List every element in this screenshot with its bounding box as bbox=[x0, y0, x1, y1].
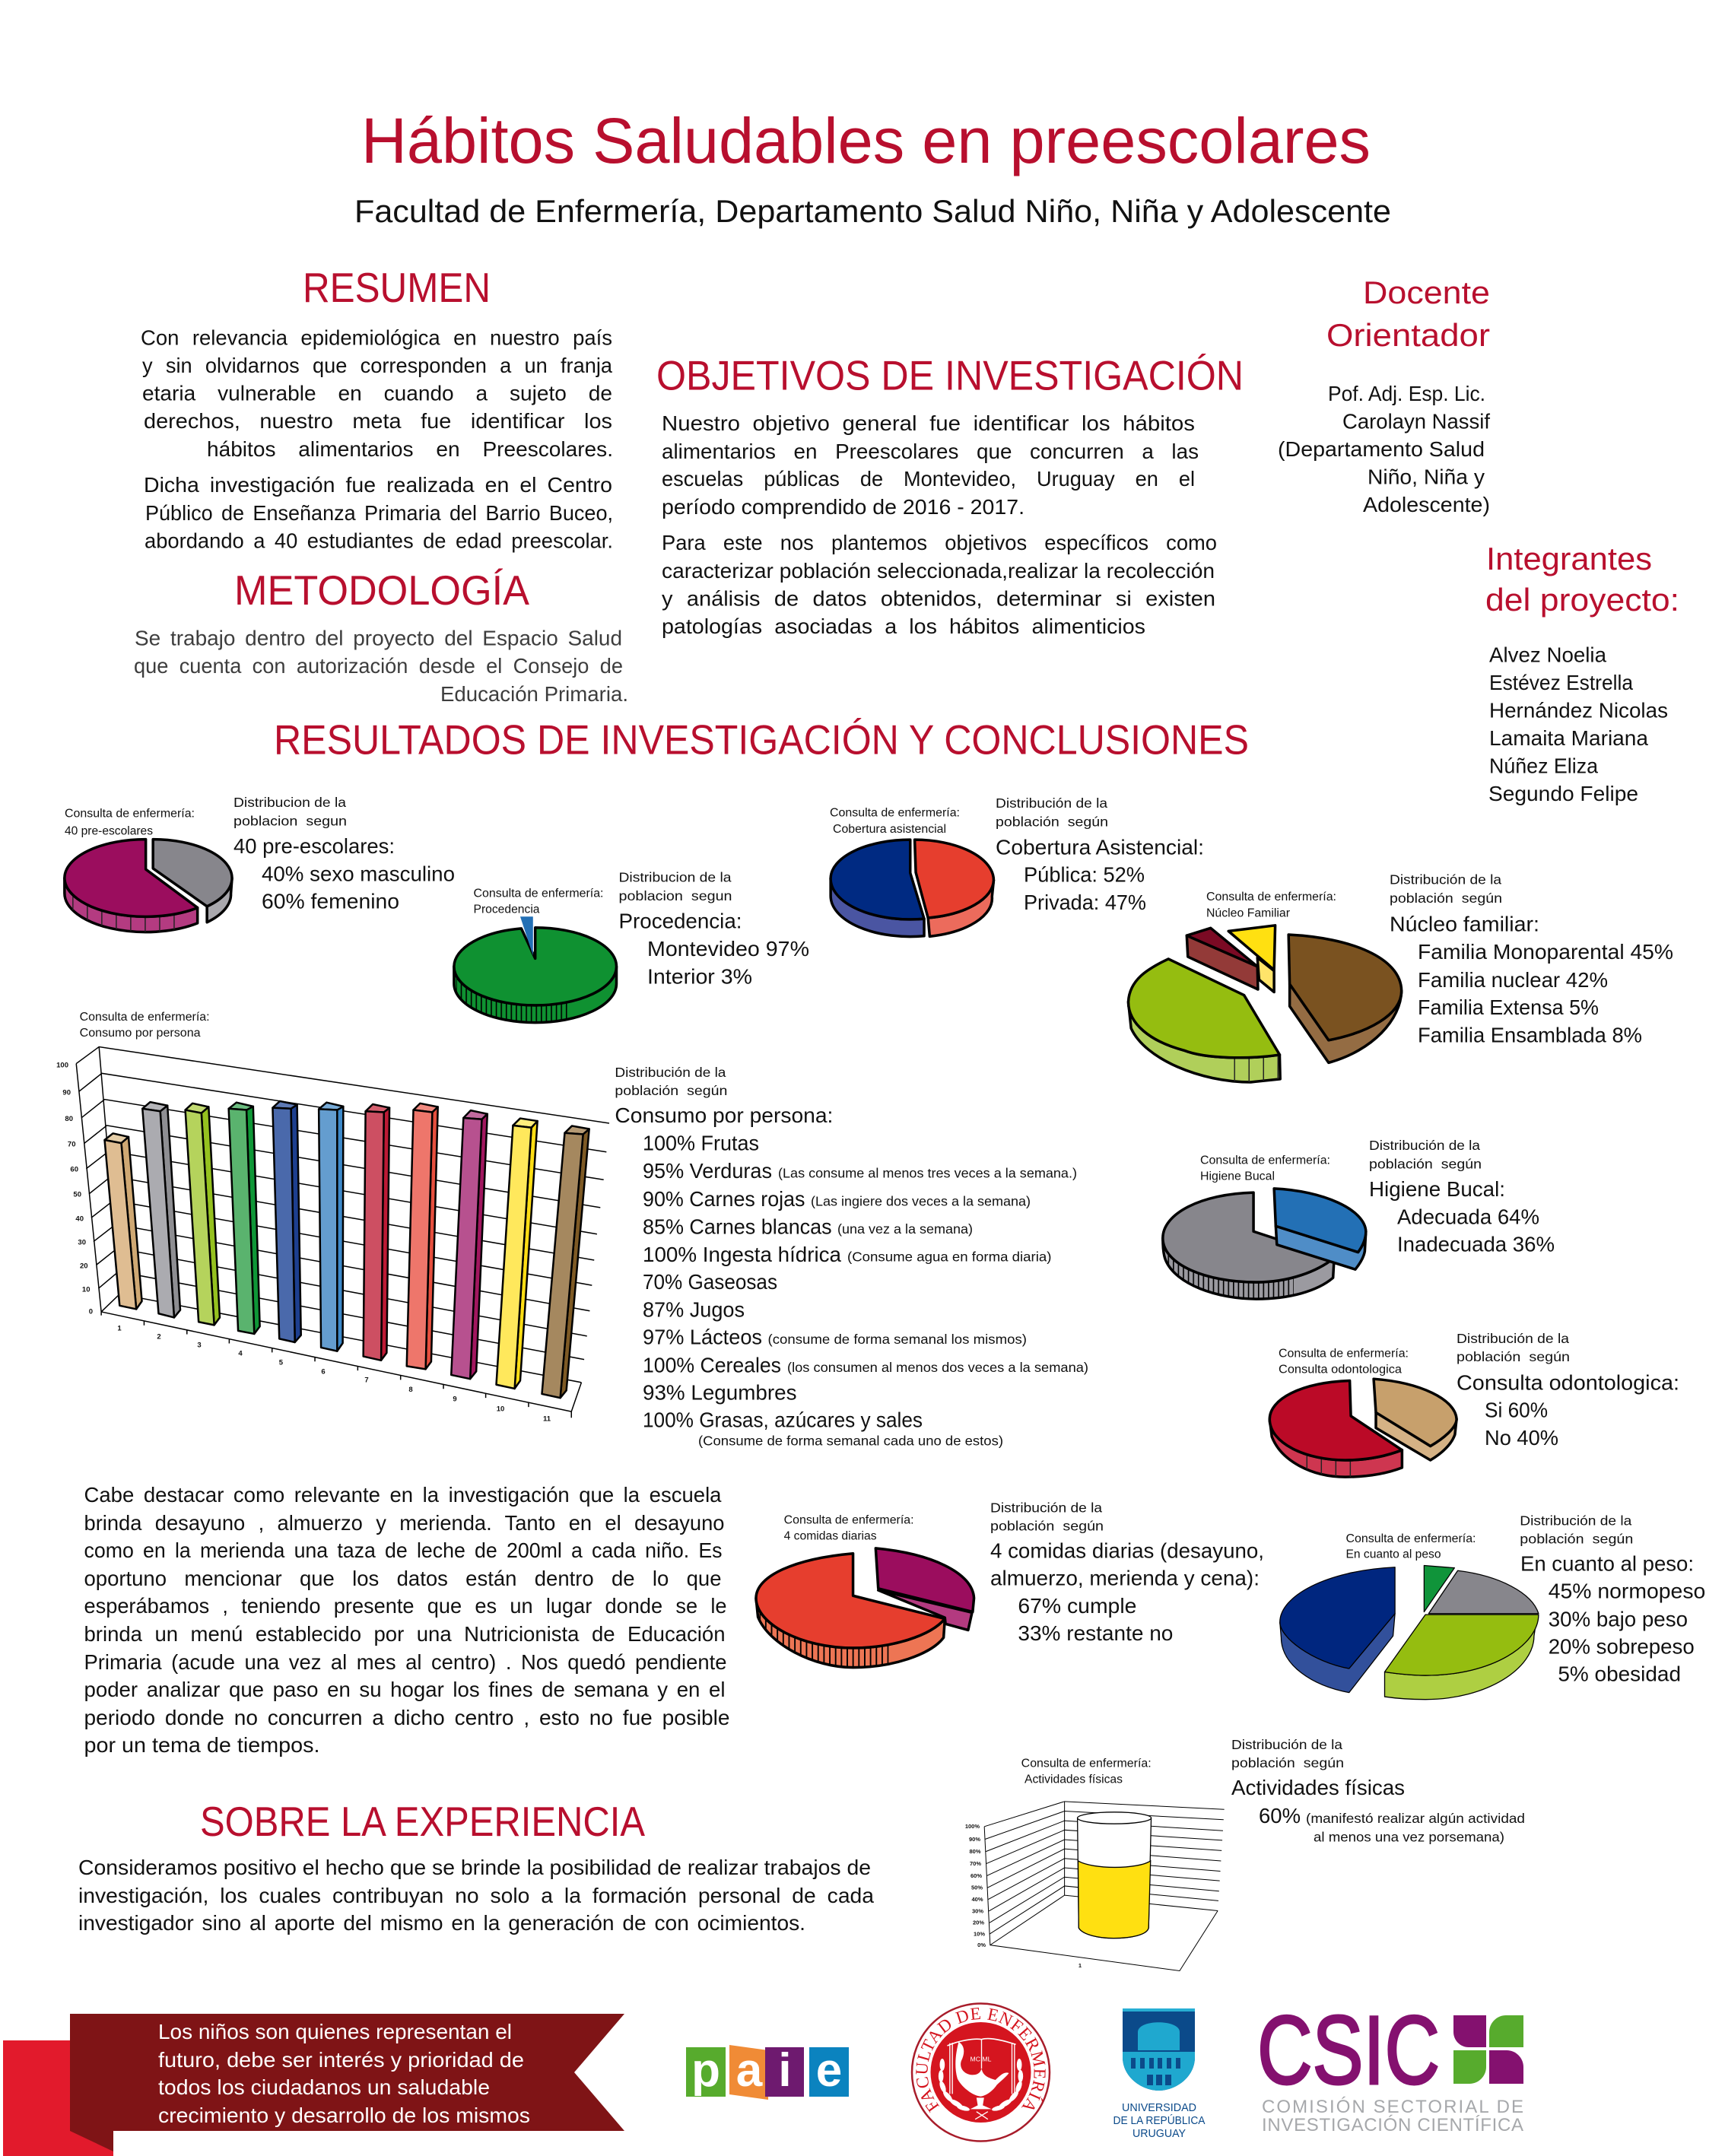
legend text: Higiene Bucal: bbox=[1369, 1177, 1505, 1201]
legend text: 95% Verduras bbox=[643, 1159, 772, 1183]
caption: Consulta de enfermería: bbox=[1021, 1757, 1152, 1770]
pie chart: sexo bbox=[65, 840, 232, 935]
legend text: 60% femenino bbox=[262, 890, 399, 913]
axis labels: 9 bbox=[453, 1395, 457, 1404]
axis labels: 10 bbox=[497, 1405, 504, 1413]
legend text: 4 comidas diarias (desayuno, bbox=[990, 1539, 1264, 1563]
logo: paie: a bbox=[736, 2044, 763, 2097]
text block: conclusiones: poder analizar que paso en su hogar los fines de semana y en el bbox=[84, 1678, 726, 1701]
banner ribbon bbox=[3, 2014, 624, 2156]
logo: facultad de enfermería: FACULTAD DE ENFERMERÍA bbox=[916, 2008, 1046, 2113]
heading: docente orientador: Orientador bbox=[1326, 317, 1490, 353]
legend text: Distribución de la bbox=[1520, 1513, 1632, 1529]
legend text: Núcleo familiar: bbox=[1390, 913, 1539, 935]
logo: paie bbox=[686, 2044, 849, 2100]
caption: Cobertura asistencial bbox=[833, 823, 946, 836]
text block: docente: Carolayn Nassif bbox=[1342, 409, 1490, 433]
axis labels: 5 bbox=[279, 1358, 284, 1367]
text block: integrantes: Lamaita Mariana bbox=[1489, 726, 1648, 750]
legend text: Procedencia: bbox=[619, 910, 742, 932]
caption: Consulta de enfermería: bbox=[784, 1513, 914, 1527]
heading: resultados: RESULTADOS DE INVESTIGACIÓN Y CONCLUSIONES bbox=[274, 716, 1249, 764]
logo: csic bbox=[1257, 1996, 1523, 2135]
text block: experiencia: Consideramos positivo el hecho que se brinde la posibilidad de realizar trabajos de bbox=[78, 1856, 871, 1879]
text block: integrantes: Estévez Estrella bbox=[1489, 671, 1633, 694]
axis labels: 20% bbox=[973, 1919, 984, 1926]
text block: objetivos: período comprendido de 2016 - 2017. bbox=[662, 495, 1025, 519]
caption: Núcleo Familiar bbox=[1206, 907, 1290, 920]
legend text bbox=[233, 795, 455, 913]
text block: docente: Pof. Adj. Esp. Lic. bbox=[1328, 382, 1485, 405]
caption bbox=[80, 1011, 210, 1040]
caption: 40 pre-escolares bbox=[65, 824, 153, 838]
text block: integrantes bbox=[1488, 643, 1668, 805]
heading: integrantes: Integrantes bbox=[1486, 541, 1652, 576]
pie chart: higiene bbox=[1163, 1189, 1366, 1302]
legend text: población según bbox=[990, 1518, 1104, 1533]
panel: cobertura asistencial bbox=[830, 795, 1204, 937]
legend text: 45% normopeso bbox=[1549, 1579, 1705, 1602]
axis labels: 90 bbox=[62, 1089, 71, 1097]
logo: universidad de la república: URUGUAY bbox=[1133, 2127, 1186, 2140]
legend text: 100% Frutas bbox=[643, 1132, 759, 1154]
axis labels: 1 bbox=[1079, 1962, 1082, 1969]
axis labels: 60 bbox=[70, 1165, 78, 1174]
panel: consumo por persona bbox=[56, 1011, 1088, 1448]
legend text: (Consume agua en forma diaria) bbox=[847, 1249, 1051, 1264]
banner text: todos los ciudadanos un saludable bbox=[158, 2075, 490, 2099]
axis labels: 3 bbox=[197, 1342, 202, 1349]
heading: objetivos: OBJETIVOS DE INVESTIGACIÓN bbox=[656, 351, 1244, 398]
legend text: (consume de forma semanal los mismos) bbox=[768, 1332, 1027, 1347]
legend text: 87% Jugos bbox=[643, 1297, 745, 1322]
legend text: población según bbox=[1231, 1755, 1344, 1770]
legend text: 40% sexo masculino bbox=[262, 862, 455, 885]
legend text: 100% Grasas, azúcares y sales bbox=[643, 1408, 923, 1431]
axis labels: 60% bbox=[971, 1872, 982, 1879]
text block: objetivos: patologías asociadas a los hábitos alimenticios bbox=[662, 614, 1145, 638]
axis labels: 11 bbox=[543, 1415, 551, 1424]
text block: resumen: etaria vulnerable en cuando a sujeto de bbox=[142, 382, 612, 405]
text block: resumen: hábitos alimentarios en Preescolares. bbox=[207, 437, 613, 461]
text block: resumen bbox=[141, 325, 613, 552]
legend text: (Las ingiere dos veces a la semana) bbox=[811, 1194, 1031, 1209]
legend text bbox=[990, 1500, 1264, 1645]
caption: Consulta de enfermería: bbox=[830, 806, 960, 820]
text block: conclusiones: brinda desayuno , almuerzo y merienda. Tanto en el desayuno bbox=[84, 1511, 724, 1535]
legend text: 70% Gaseosas bbox=[643, 1270, 777, 1294]
heading: sobre la experiencia: SOBRE LA EXPERIENCIA bbox=[200, 1798, 645, 1845]
axis labels: 90% bbox=[969, 1836, 980, 1843]
legend text: 93% Legumbres bbox=[643, 1381, 797, 1404]
logo: paie: e bbox=[816, 2044, 842, 2097]
caption: Consumo por persona bbox=[80, 1027, 201, 1040]
pie chart: peso bbox=[1280, 1566, 1539, 1700]
axis labels: 2 bbox=[157, 1332, 161, 1342]
logo: universidad de la república bbox=[1113, 2008, 1205, 2140]
logo: csic: COMISIÓN SECTORIAL DE bbox=[1262, 2097, 1523, 2117]
text block: experiencia: investigación, los cuales contribuyan no solo a la formación personal de cada bbox=[78, 1884, 874, 1907]
banner text bbox=[158, 2020, 530, 2127]
axis labels: 10 bbox=[82, 1285, 90, 1294]
axis labels: 6 bbox=[321, 1367, 326, 1376]
text block: integrantes: Segundo Felipe bbox=[1488, 782, 1638, 805]
axis labels: 80% bbox=[969, 1848, 981, 1855]
logo: paie: i bbox=[778, 2044, 792, 2097]
caption bbox=[1206, 891, 1336, 920]
axis labels: 100% bbox=[965, 1823, 980, 1830]
legend text: 5% obesidad bbox=[1558, 1662, 1681, 1686]
banner text: crecimiento y desarrollo de los mismos bbox=[158, 2104, 530, 2127]
axis labels: 0 bbox=[89, 1308, 93, 1316]
heading: metodología: METODOLOGÍA bbox=[234, 567, 529, 614]
bar chart: consumo bbox=[56, 1047, 609, 1424]
heading: resumen: RESUMEN bbox=[303, 264, 491, 311]
axis labels: 50% bbox=[971, 1885, 983, 1891]
text block: integrantes: Alvez Noelia bbox=[1489, 643, 1606, 666]
text block: resumen: Público de Enseñanza Primaria del Barrio Buceo, bbox=[145, 501, 613, 525]
axis labels: 50 bbox=[73, 1191, 81, 1199]
text block: experiencia bbox=[78, 1856, 874, 1935]
legend text: Cobertura Asistencial: bbox=[996, 835, 1204, 859]
legend text: (Consume de forma semanal cada uno de estos) bbox=[698, 1433, 1003, 1448]
legend text: (una vez a la semana) bbox=[837, 1221, 973, 1237]
logo: universidad de la república: UNIVERSIDAD bbox=[1122, 2101, 1196, 2114]
banner text: futuro, debe ser interés y prioridad de bbox=[158, 2048, 524, 2072]
legend text: (manifestó realizar algún actividad bbox=[1306, 1811, 1525, 1826]
text block: docente bbox=[1278, 382, 1490, 516]
axis labels: 40% bbox=[971, 1896, 983, 1903]
caption: Higiene Bucal bbox=[1200, 1170, 1275, 1183]
axis labels: 10% bbox=[974, 1930, 985, 1938]
legend text: Pública: 52% bbox=[1024, 862, 1145, 887]
text block: resumen: Con relevancia epidemiológica en nuestro país bbox=[141, 325, 612, 350]
caption: Consulta de enfermería: bbox=[65, 808, 195, 820]
legend text: Interior 3% bbox=[647, 965, 752, 989]
legend text: En cuanto al peso: bbox=[1520, 1551, 1694, 1575]
legend text: 40 pre-escolares: bbox=[233, 834, 395, 858]
text block: conclusiones: por un tema de tiempos. bbox=[84, 1733, 320, 1757]
text block: objetivos: Nuestro objetivo general fue identificar los hábitos bbox=[662, 411, 1195, 435]
text block: conclusiones: como en la merienda una taza de leche de 200ml a cada niño. Es bbox=[84, 1538, 723, 1562]
legend text: Montevideo 97% bbox=[647, 937, 809, 961]
legend text: almuerzo, merienda y cena): bbox=[990, 1567, 1260, 1590]
axis labels: 1 bbox=[117, 1325, 122, 1332]
caption: 4 comidas diarias bbox=[784, 1530, 877, 1542]
legend text: Distribución de la bbox=[1231, 1737, 1342, 1752]
text block: objetivos: escuelas públicas de Montevideo, Uruguay en el bbox=[662, 467, 1195, 491]
logo: facultad de enfermería: MC ML bbox=[971, 2056, 992, 2063]
axis labels: 100 bbox=[56, 1062, 68, 1069]
legend text: Distribución de la bbox=[615, 1065, 726, 1080]
legend text: Si 60% bbox=[1485, 1398, 1548, 1422]
legend text: Consulta odontologica: bbox=[1457, 1370, 1679, 1395]
legend text: Distribución de la bbox=[1457, 1331, 1569, 1346]
text block: resumen: derechos, nuestro meta fue identificar los bbox=[144, 409, 612, 433]
legend text: Distribución de la bbox=[1369, 1138, 1480, 1153]
logo: csic: CSIC bbox=[1257, 1996, 1440, 2105]
caption bbox=[1200, 1154, 1330, 1183]
text block: conclusiones bbox=[84, 1483, 730, 1757]
text block: conclusiones: periodo donde no concurren a dicho centro , esto no fue posible bbox=[84, 1706, 730, 1729]
axis labels: 70 bbox=[68, 1141, 76, 1148]
pie chart: odontológica bbox=[1269, 1379, 1457, 1478]
caption: Procedencia bbox=[473, 903, 540, 916]
caption: Consulta de enfermería: bbox=[1206, 891, 1336, 903]
panel: 40 pre-escolares bbox=[65, 795, 455, 935]
legend text: Distribución de la bbox=[990, 1500, 1102, 1515]
panel: procedencia bbox=[454, 870, 809, 1028]
heading: docente orientador bbox=[1326, 275, 1490, 353]
text block: conclusiones: brinda un menú establecido por una Nutricionista de Educación bbox=[84, 1622, 726, 1646]
logo: csic: INVESTIGACIÓN CIENTÍFICA bbox=[1262, 2115, 1523, 2135]
heading: integrantes: del proyecto: bbox=[1485, 582, 1679, 618]
legend text: 90% Carnes rojas bbox=[643, 1187, 805, 1211]
caption bbox=[830, 806, 960, 836]
caption bbox=[1279, 1348, 1409, 1376]
caption bbox=[65, 808, 195, 838]
legend text: población según bbox=[1520, 1532, 1633, 1547]
axis labels: 70% bbox=[970, 1860, 981, 1867]
text block: metodología: Educación Primaria. bbox=[440, 682, 628, 706]
caption: Consulta de enfermería: bbox=[473, 887, 604, 900]
legend text: Adecuada 64% bbox=[1397, 1205, 1539, 1229]
legend text: 20% sobrepeso bbox=[1549, 1635, 1695, 1659]
axis labels: 0% bbox=[977, 1942, 986, 1948]
axis labels: 80 bbox=[65, 1115, 73, 1123]
text block: docente: (Departamento Salud bbox=[1278, 437, 1485, 461]
legend text: 100% Ingesta hídrica bbox=[643, 1243, 841, 1266]
legend text: Distribucion de la bbox=[619, 870, 732, 885]
subtitle: Facultad de Enfermería, Departamento Salud Niño, Niña y Adolescente bbox=[354, 193, 1391, 229]
axis labels bbox=[56, 1062, 551, 1424]
pie chart: cobertura bbox=[831, 840, 993, 937]
text block: conclusiones: esperábamos , teniendo presente que es un lugar donde se le bbox=[84, 1594, 727, 1618]
legend text: 85% Carnes blancas bbox=[643, 1215, 832, 1238]
legend text: poblacion segun bbox=[233, 814, 347, 829]
legend text: Familia nuclear 42% bbox=[1418, 968, 1608, 992]
caption bbox=[784, 1513, 914, 1542]
legend text: Distribucion de la bbox=[233, 795, 346, 810]
text block: resumen: abordando a 40 estudiantes de edad preescolar. bbox=[145, 529, 613, 552]
text block: metodología bbox=[134, 627, 628, 706]
axis labels bbox=[965, 1823, 1082, 1969]
caption: Consulta de enfermería: bbox=[1200, 1154, 1330, 1167]
caption: En cuanto al peso bbox=[1346, 1548, 1441, 1561]
axis labels: 20 bbox=[80, 1262, 88, 1270]
cylinder chart bbox=[965, 1802, 1225, 1971]
legend text: (Las consume al menos tres veces a la semana.) bbox=[778, 1165, 1077, 1180]
text block: objetivos bbox=[662, 411, 1217, 638]
panel: higiene bucal bbox=[1163, 1138, 1555, 1302]
legend text: Actividades físicas bbox=[1231, 1776, 1405, 1799]
panel: núcleo familiar bbox=[1128, 872, 1673, 1086]
legend text: población según bbox=[1369, 1156, 1482, 1171]
panel: actividades físicas bbox=[965, 1737, 1525, 1971]
logo: paie: p bbox=[691, 2044, 720, 2097]
legend text: 33% restante no bbox=[1018, 1621, 1173, 1645]
legend text bbox=[1390, 872, 1673, 1046]
legend text: población según bbox=[996, 814, 1108, 829]
legend text bbox=[1369, 1138, 1555, 1256]
axis labels: 7 bbox=[364, 1376, 369, 1384]
caption: Consulta de enfermería: bbox=[1346, 1532, 1476, 1545]
caption: Consulta odontologica bbox=[1279, 1363, 1402, 1376]
legend text: Familia Ensamblada 8% bbox=[1418, 1024, 1642, 1046]
text block: metodología: que cuenta con autorización desde el Consejo de bbox=[134, 654, 623, 678]
legend text: población según bbox=[1457, 1349, 1570, 1364]
text block: conclusiones: Cabe destacar como relevante en la investigación que la escuela bbox=[84, 1483, 722, 1507]
heading: docente orientador: Docente bbox=[1363, 275, 1490, 310]
legend text bbox=[619, 870, 809, 989]
text block: resumen: Dicha investigación fue realizada en el Centro bbox=[144, 473, 612, 497]
text block: conclusiones: oportuno mencionar que los datos están dentro de lo que bbox=[84, 1567, 721, 1590]
legend text: 67% cumple bbox=[1018, 1594, 1136, 1618]
legend text bbox=[1231, 1737, 1525, 1845]
legend text: 97% Lácteos bbox=[643, 1325, 762, 1349]
legend text bbox=[615, 1065, 1088, 1448]
pie chart: núcleo familiar bbox=[1128, 926, 1402, 1086]
title: Hábitos Saludables en preescolares bbox=[361, 105, 1371, 176]
panel: en cuanto al peso bbox=[1280, 1513, 1705, 1700]
legend text: al menos una vez porsemana) bbox=[1314, 1830, 1504, 1845]
text block: objetivos: alimentarios en Preescolares que concurren a las bbox=[662, 440, 1199, 463]
axis labels: 8 bbox=[408, 1386, 413, 1394]
text block: integrantes: Núñez Eliza bbox=[1489, 754, 1598, 777]
legend text: poblacion segun bbox=[619, 888, 732, 903]
legend text: población según bbox=[1390, 891, 1502, 906]
legend text bbox=[1457, 1331, 1679, 1450]
text block: docente: Adolescente) bbox=[1363, 493, 1490, 516]
caption: Consulta de enfermería: bbox=[1279, 1348, 1409, 1360]
axis labels: 30% bbox=[972, 1907, 983, 1915]
legend text: Inadecuada 36% bbox=[1397, 1232, 1555, 1256]
caption: Consulta de enfermería: bbox=[80, 1011, 210, 1024]
panel: consulta odontológica bbox=[1269, 1331, 1679, 1478]
axis labels: 4 bbox=[238, 1349, 243, 1358]
text block: resumen: y sin olvidarnos que corresponden a un franja bbox=[142, 354, 612, 377]
legend text: Privada: 47% bbox=[1024, 891, 1146, 914]
legend text: Distribución de la bbox=[1390, 872, 1501, 887]
axis labels: 40 bbox=[75, 1215, 84, 1223]
legend text: Familia Extensa 5% bbox=[1418, 995, 1599, 1019]
text block: metodología: Se trabajo dentro del proyecto del Espacio Salud bbox=[135, 627, 622, 649]
text block: conclusiones: Primaria (acude una vez al mes al centro) . Nos quedó pendiente bbox=[84, 1650, 727, 1674]
pie chart: comidas bbox=[756, 1548, 974, 1669]
text block: experiencia: investigador sino al aporte del mismo en la generación de con ocimientos. bbox=[78, 1911, 805, 1935]
caption: Actividades físicas bbox=[1025, 1773, 1123, 1786]
caption bbox=[1346, 1532, 1476, 1561]
legend text: (los consumen al menos dos veces a la semana) bbox=[787, 1360, 1088, 1375]
legend text: Distribución de la bbox=[996, 795, 1107, 811]
text block: integrantes: Hernández Nicolas bbox=[1489, 698, 1668, 722]
text block: docente: Niño, Niña y bbox=[1368, 465, 1485, 488]
heading: integrantes bbox=[1485, 541, 1679, 618]
axis labels: 30 bbox=[78, 1238, 86, 1247]
text block: objetivos: caracterizar población seleccionada,realizar la recolección bbox=[662, 559, 1215, 583]
legend text: No 40% bbox=[1485, 1426, 1558, 1450]
legend text: Consumo por persona: bbox=[615, 1103, 833, 1127]
text block: objetivos: Para este nos plantemos objetivos específicos como bbox=[662, 531, 1217, 554]
banner text: Los niños son quienes representan el bbox=[158, 2020, 512, 2043]
legend text bbox=[1520, 1513, 1705, 1686]
legend text: 30% bajo peso bbox=[1549, 1607, 1688, 1630]
caption bbox=[1021, 1757, 1152, 1786]
text block: objetivos: y análisis de datos obtenidos, determinar si existen bbox=[662, 587, 1215, 610]
logo: universidad de la república: DE LA REPÚBLICA bbox=[1113, 2114, 1205, 2127]
legend text: 100% Cereales bbox=[643, 1354, 781, 1376]
legend text bbox=[996, 795, 1204, 914]
panel: 4 comidas diarias bbox=[756, 1500, 1264, 1669]
legend text: 60% bbox=[1259, 1804, 1301, 1827]
caption bbox=[473, 887, 604, 916]
pie chart: procedencia bbox=[454, 916, 617, 1028]
legend text: población según bbox=[615, 1083, 727, 1098]
legend text: Familia Monoparental 45% bbox=[1418, 940, 1673, 964]
